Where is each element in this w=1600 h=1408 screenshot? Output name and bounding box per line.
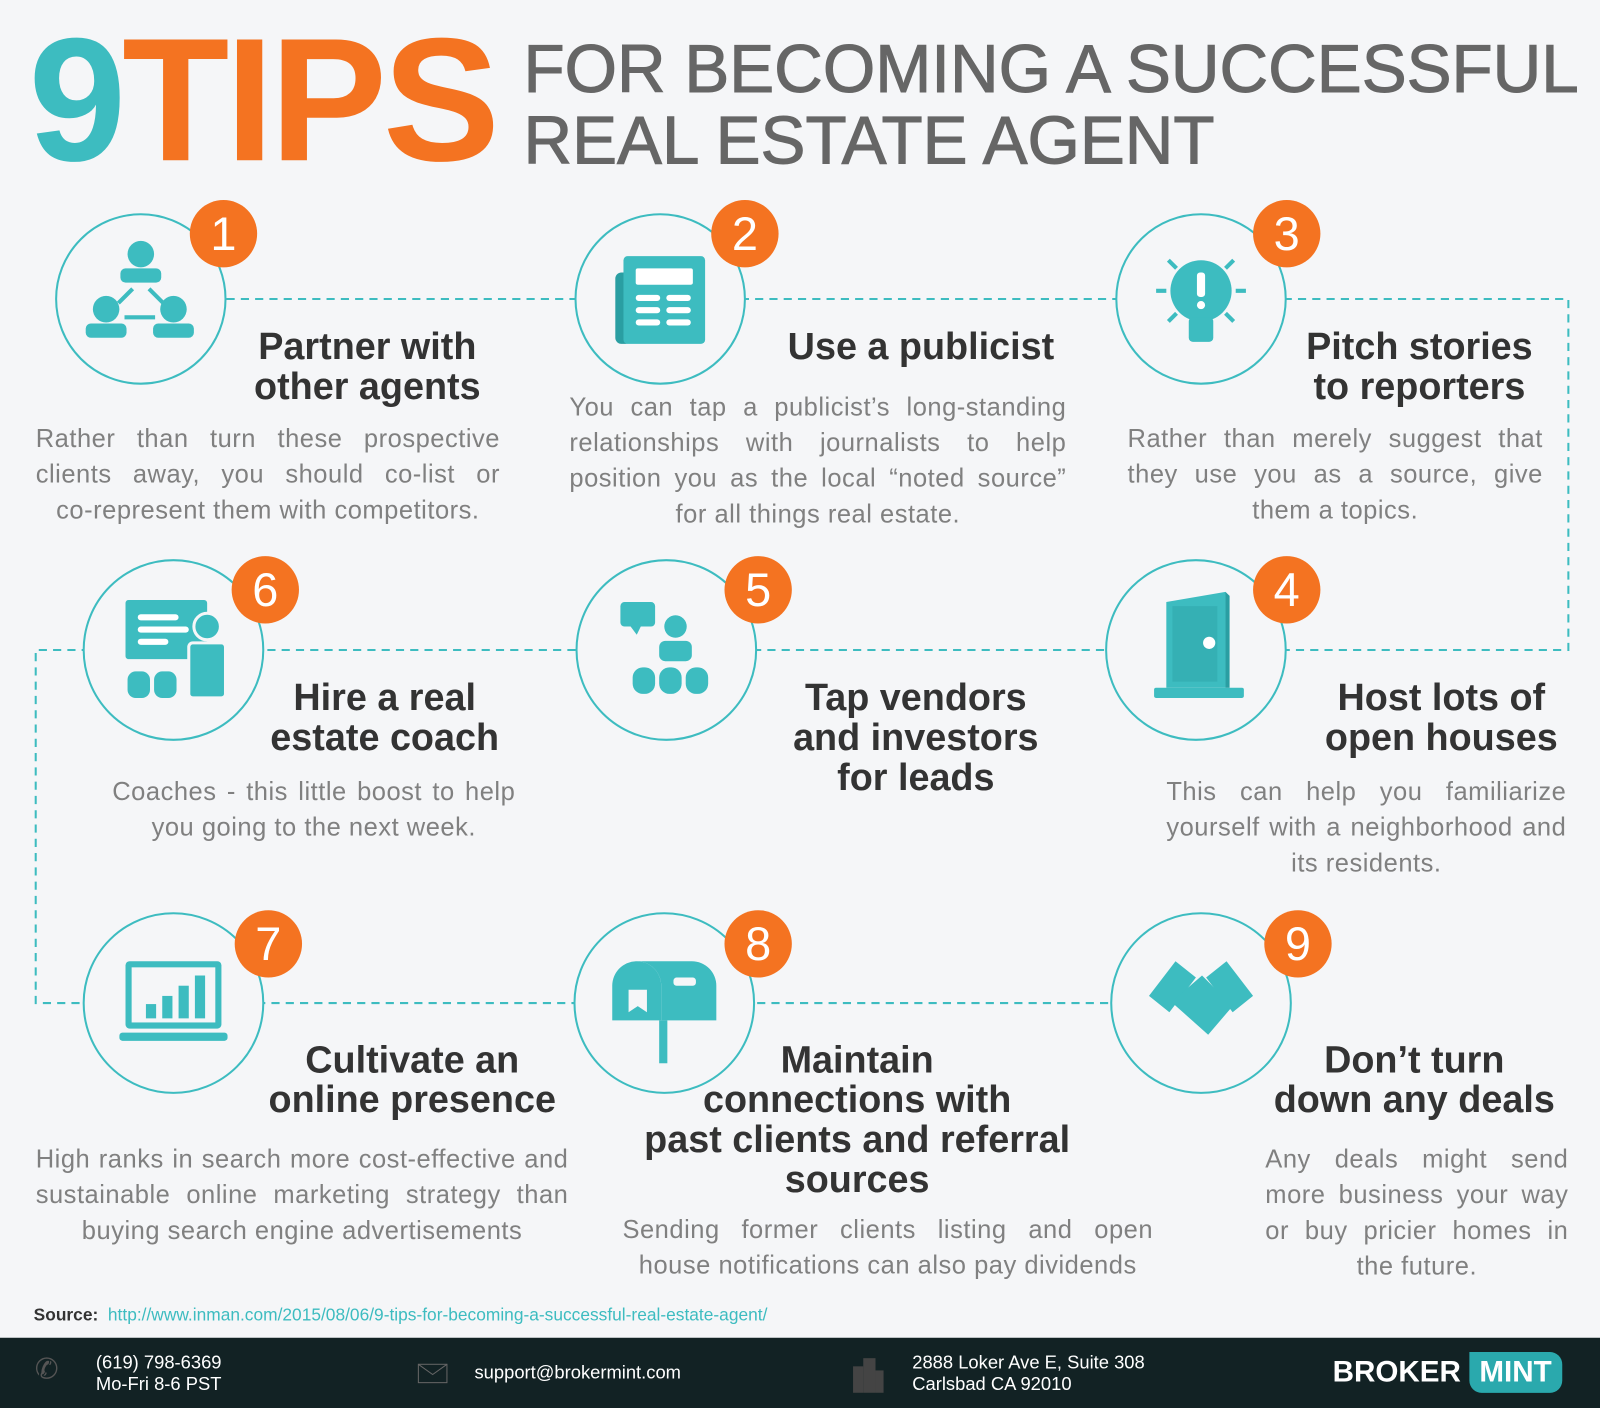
heading 4: Host lots of (1337, 677, 1545, 718)
icon: vendors (576, 559, 757, 741)
title: 9TIPS (29, 2, 496, 198)
logo (1333, 1352, 1562, 1393)
tip 8 (574, 910, 1332, 1094)
icon: envelope (418, 1364, 448, 1384)
email text: support@brokermint.com (474, 1362, 681, 1383)
heading 8: Maintain (781, 1039, 934, 1081)
tip 7 (82, 910, 1292, 1094)
text: 7 (255, 917, 281, 970)
heading 3: to reporters (1313, 365, 1525, 407)
heading 8 (644, 1039, 1070, 1200)
tip 1 (55, 200, 298, 622)
logo: MINT (1479, 1356, 1552, 1389)
tip 4 (1105, 556, 1320, 978)
heading 5: Tap vendors (805, 677, 1027, 718)
phone text: Mo-Fri 8-6 PST (96, 1373, 221, 1394)
heading 9: Don’t turn (1324, 1039, 1504, 1081)
body 4: This can help you familiarize yourself with a neighborhood and its residents. (1166, 778, 1566, 878)
text: 4 (1274, 563, 1300, 616)
body 2: You can tap a publicist’s long-standing relationships with journalists to help position you as the local “noted source” for all things real estate. (569, 393, 1066, 529)
body 7: High ranks in search more cost-effective and sustainable online marketing strategy than buying search engine advertisements (36, 1145, 568, 1245)
tip 5 (576, 556, 1296, 978)
text: 5 (745, 563, 771, 616)
icon: light bulb (1115, 213, 1287, 385)
heading 9 (1274, 1039, 1555, 1120)
title: FOR BECOMING A SUCCESSFUL (523, 31, 1579, 106)
heading 6 (270, 677, 499, 758)
address text (912, 1352, 1145, 1394)
phone text: (619) 798-6369 (96, 1352, 222, 1372)
heading 9: down any deals (1274, 1079, 1555, 1120)
title (29, 2, 1579, 198)
heading 6: estate coach (270, 716, 499, 758)
icon: newspaper (574, 213, 746, 385)
address text: Carlsbad CA 92010 (912, 1373, 1072, 1394)
icon: mailbox (573, 912, 755, 1094)
body 1: Rather than turn these prospective clients away, you should co‑list or co‑represent them with competitors. (36, 424, 500, 524)
text: 6 (252, 563, 278, 616)
text: 3 (1274, 207, 1300, 260)
text: 2 (732, 207, 758, 260)
heading 7: Cultivate an (305, 1039, 519, 1081)
icon: coach board (83, 559, 264, 741)
body 3: Rather than merely suggest that they use you as a source, give them a topics. (1128, 424, 1543, 524)
body 6: Coaches - this little boost to help you going to the next week. (112, 778, 515, 842)
body 8: Sending former clients listing and open house notifications can also pay dividends (622, 1215, 1153, 1280)
footer (0, 1338, 1600, 1408)
heading 4 (1325, 677, 1558, 758)
phone text (96, 1352, 222, 1394)
logo: BROKER (1333, 1356, 1461, 1389)
tip 6 (82, 556, 299, 741)
icon: door (1105, 559, 1287, 741)
icon: handshake (1110, 912, 1292, 1094)
heading 3: Pitch stories (1306, 326, 1533, 367)
heading 5: and investors (793, 716, 1039, 758)
heading 5 (793, 677, 1039, 798)
heading 4: open houses (1325, 716, 1558, 758)
address text: 2888 Loker Ave E, Suite 308 (912, 1352, 1145, 1372)
tip 9 (1110, 910, 1332, 1094)
heading 7 (269, 1039, 556, 1120)
icon: building (853, 1358, 884, 1393)
title: REAL ESTATE AGENT (523, 102, 1215, 178)
heading 7: online presence (269, 1079, 556, 1120)
tip 3 (1115, 200, 1328, 968)
heading 8: past clients and referral (644, 1118, 1070, 1160)
icon: phone: ✆ (35, 1353, 59, 1385)
heading 1: other agents (254, 365, 481, 407)
text: 8 (745, 917, 771, 970)
heading 6: Hire a real (293, 677, 476, 718)
body 9: Any deals might send more business your way or buy pricier homes in the future. (1265, 1145, 1568, 1281)
source line: Source: http://www.inman.com/2015/08/06/9-tips-for-becoming-a-successful-real-estate-agent/ (34, 1305, 767, 1324)
heading 3 (1306, 326, 1533, 407)
icon: laptop chart (83, 912, 264, 1094)
icon: agents network (55, 213, 227, 385)
text: 9 (1285, 917, 1311, 970)
text: 1 (210, 207, 237, 260)
heading 1: Partner with (258, 326, 476, 367)
heading 1 (254, 326, 481, 407)
heading 8: connections with (703, 1079, 1011, 1120)
heading 5: for leads (837, 756, 994, 798)
tip 2 (574, 200, 779, 385)
heading 2: Use a publicist (788, 326, 1054, 367)
heading 8: sources (785, 1158, 930, 1200)
